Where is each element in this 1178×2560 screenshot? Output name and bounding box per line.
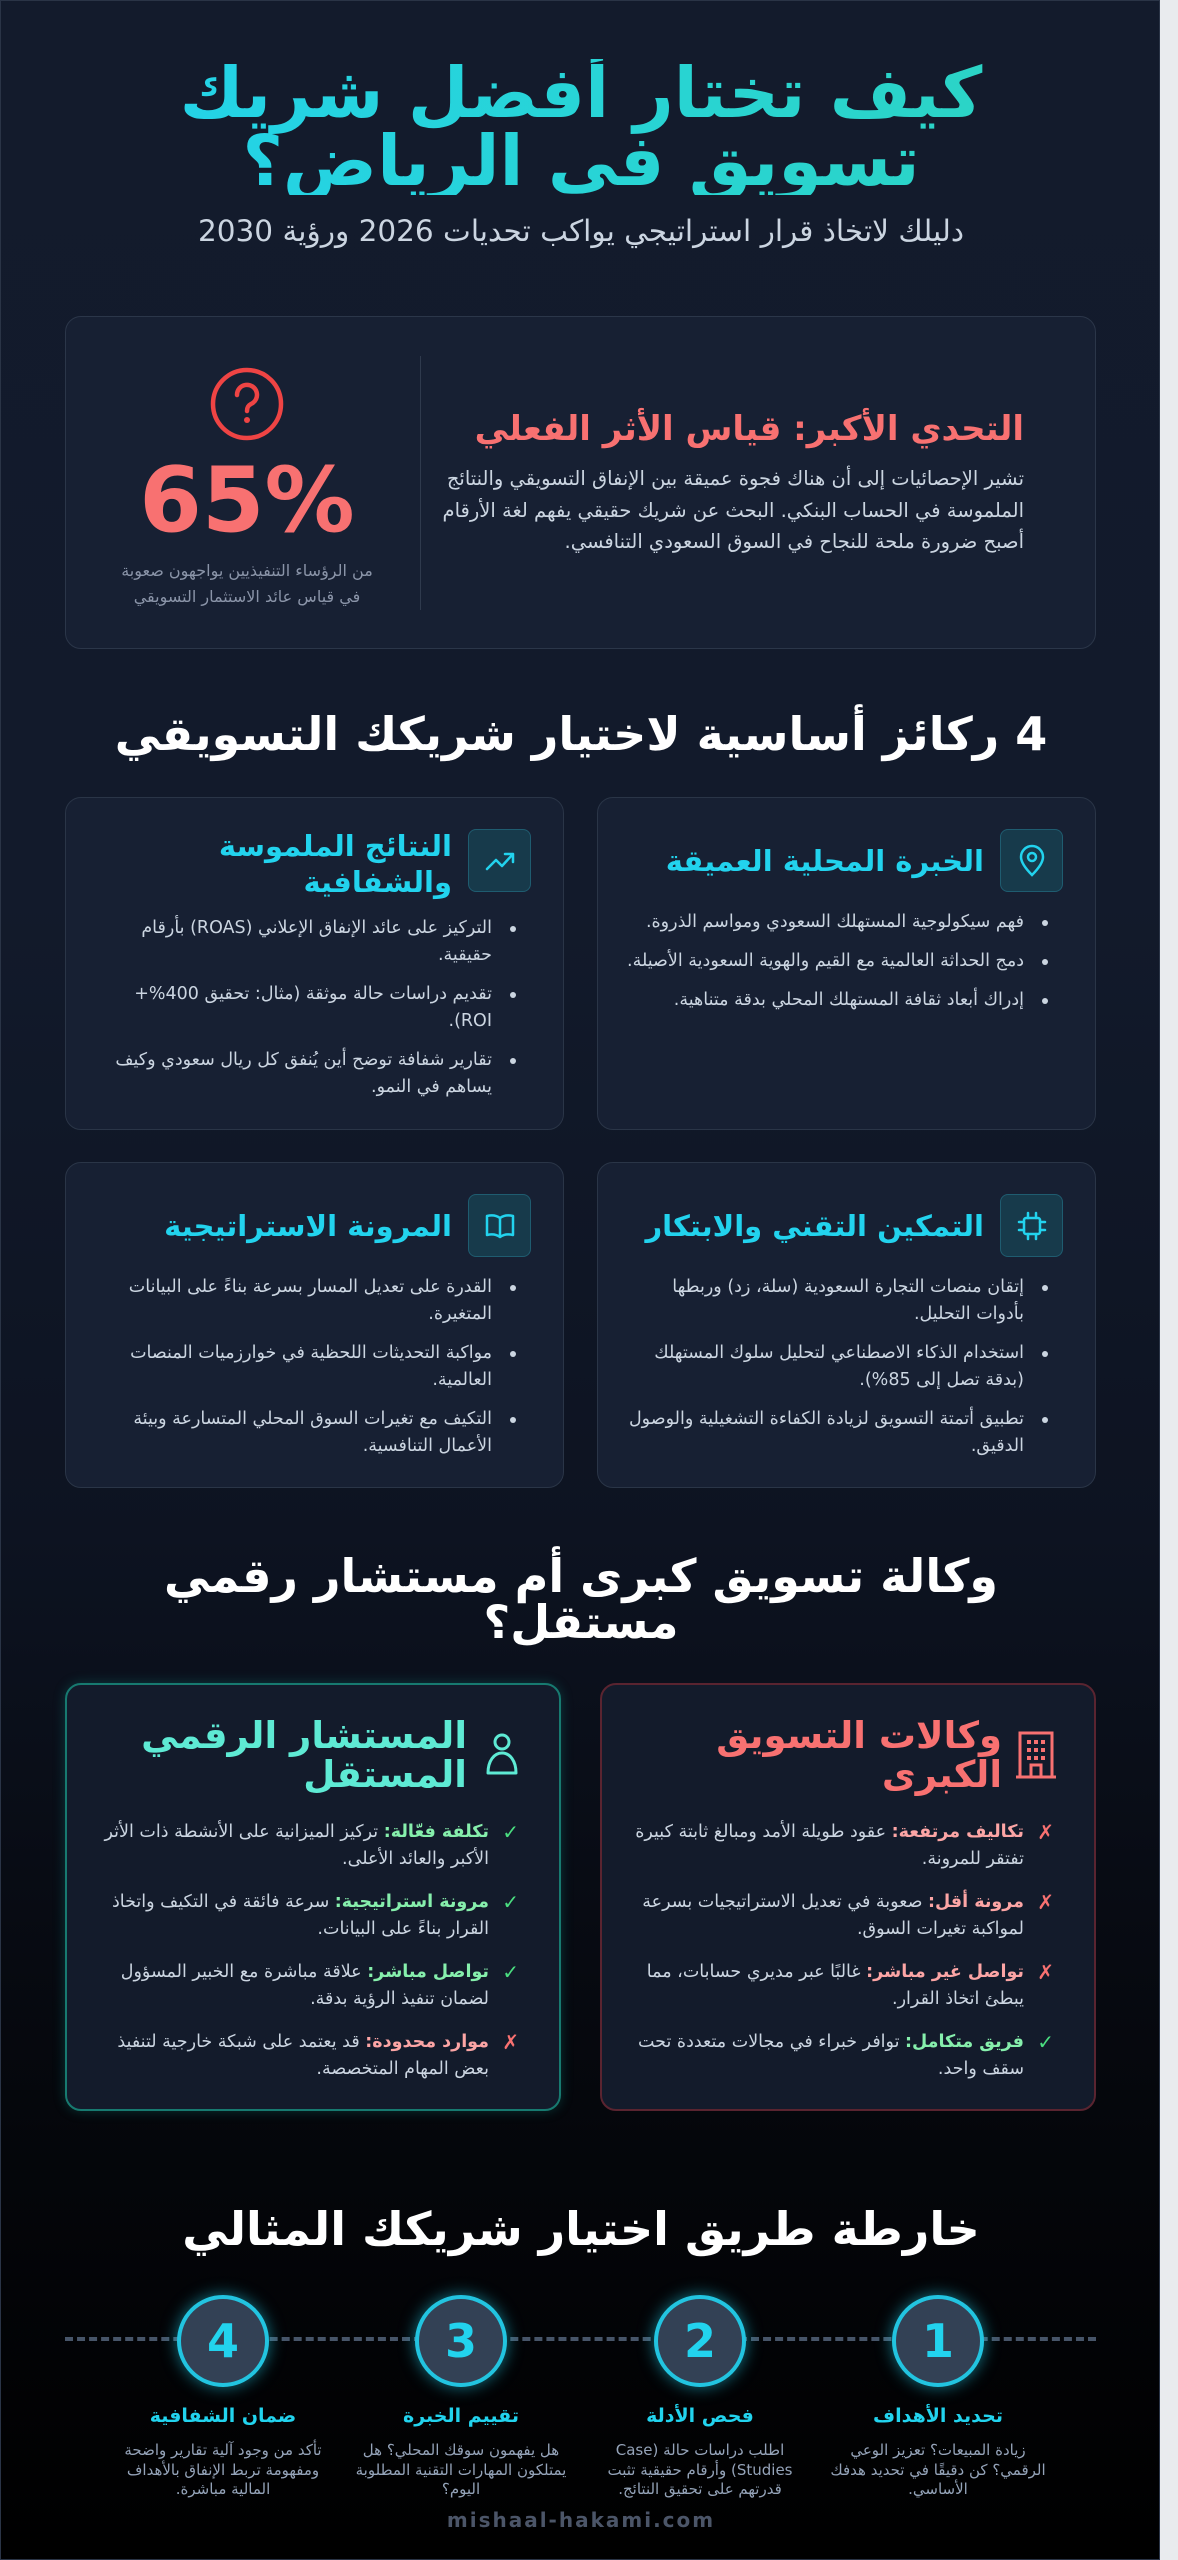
card title: التمكين التقني والابتكار	[645, 1209, 984, 1243]
heading: agency vs consultant	[164, 1546, 998, 1649]
title: المستقل	[303, 1753, 467, 1796]
step 3	[356, 2284, 566, 2498]
bullets	[115, 915, 516, 1097]
card title: النتائج الملموسة	[219, 829, 452, 863]
icon: location pin	[1000, 829, 1063, 892]
list: ✓	[502, 1820, 519, 1844]
step 3: هل يفهمون سوقك المحلي؟ هل يمتلكون المهارات التقنية المطلوبة اليوم؟	[356, 2441, 566, 2498]
card: tech enablement	[597, 1162, 1096, 1488]
list: ✗	[1037, 1820, 1054, 1844]
list: تكاليف مرتفعة: عقود طويلة الأمد ومبالغ ثابتة كبيرة تفتقر للمرونة.	[635, 1822, 1024, 1869]
bullets: القدرة على تعديل المسار بسرعة بناءً على البيانات المتغيرة.	[129, 1277, 492, 1324]
list: مرونة أقل: صعوبة في تعديل الاستراتيجيات بسرعة لمواكبة تغيرات السوق.	[642, 1892, 1024, 1939]
list: موارد محدودة: قد يعتمد على شبكة خارجية لتنفيذ بعض المهام المتخصصة.	[117, 2032, 489, 2079]
icon: trend up	[468, 829, 531, 892]
list	[104, 1820, 519, 2079]
heading: roadmap: خارطة طريق اختيار شريكك المثالي	[182, 2202, 980, 2256]
bullets: إتقان منصات التجارة السعودية (سلة، زد) وربطها بأدوات التحليل.	[672, 1277, 1024, 1324]
list: فريق متكامل: توافر خبراء في مجالات متعددة تحت سقف واحد.	[638, 2032, 1024, 2079]
bullets: تقارير شفافة توضح أين يُنفق كل ريال سعودي وكيف يساهم في النمو.	[115, 1050, 492, 1097]
panel: independent consultant	[65, 1683, 561, 2111]
step 4: ضمان الشفافية	[150, 2405, 296, 2427]
panel: big agencies	[600, 1683, 1096, 2111]
step 2: 2	[684, 2314, 716, 2368]
bullets: تقديم دراسات حالة موثقة (مثال: تحقيق 400%+ ROI).	[134, 984, 492, 1031]
title: الكبرى	[882, 1753, 1002, 1796]
card title: والشفافية	[303, 865, 452, 899]
step 1	[830, 2284, 1046, 2498]
title: المستشار الرقمي	[141, 1714, 467, 1757]
step 4: تأكد من وجود آلية تقارير واضحة ومفهومة تربط الإنفاق بالأهداف المالية مباشرة.	[124, 2441, 322, 2498]
title: تسويق في الرياض؟	[242, 120, 920, 202]
list: تكلفة فعّالة: تركيز الميزانية على الأنشطة ذات الأثر الأكبر والعائد الأعلى.	[104, 1822, 489, 1869]
card: strategic flexibility	[65, 1162, 564, 1488]
icon: person	[486, 1734, 518, 1774]
list: ✗	[1037, 1890, 1054, 1914]
title	[1, 59, 1161, 195]
list: ✓	[502, 1960, 519, 1984]
bullets: التركيز على عائد الإنفاق الإعلاني (ROAS) بأرقام حقيقية.	[141, 918, 492, 965]
title: كيف تختار أفضل شريك	[180, 52, 982, 134]
icon: building	[1016, 1732, 1056, 1778]
card title	[219, 829, 452, 900]
icon: book	[468, 1194, 531, 1257]
heading: agency vs consultant: وكالة تسويق كبرى أم مستشار رقمي	[164, 1549, 998, 1603]
bullets	[627, 912, 1048, 1010]
list: مرونة استراتيجية: سرعة فائقة في التكيف واتخاذ القرار بناءً على البيانات.	[112, 1892, 489, 1939]
card: local expertise	[597, 797, 1096, 1130]
stat caption: في قياس عائد الاستثمار التسويقي	[134, 587, 360, 606]
list: ✓	[1037, 2030, 1054, 2054]
step 1: زيادة المبيعات؟ تعزيز الوعي الرقمي؟ كن دقيقًا في تحديد هدفك الأساسي.	[830, 2441, 1046, 2498]
title	[716, 1714, 1002, 1796]
bullets: التكيف مع تغيرات السوق المحلي المتسارعة وبيئة الأعمال التنافسية.	[133, 1409, 492, 1456]
footer: mishaal-hakami.com	[447, 2508, 715, 2532]
bullets: دمج الحداثة العالمية مع القيم والهوية السعودية الأصيلة.	[627, 951, 1024, 971]
list	[635, 1820, 1054, 2079]
step 4	[124, 2284, 322, 2498]
stat 65%: 65%	[139, 448, 355, 553]
step 3: 3	[445, 2314, 477, 2368]
title	[141, 1714, 467, 1796]
list: ✗	[502, 2030, 519, 2054]
title: وكالات التسويق	[716, 1714, 1002, 1757]
step 2: فحص الأدلة	[646, 2405, 754, 2427]
bullets: مواكبة التحديثات اللحظية في خوارزميات المنصات العالمية.	[130, 1343, 492, 1390]
bullets: إدراك أبعاد ثقافة المستهلك المحلي بدقة متناهية.	[674, 990, 1024, 1010]
icon: question circle	[210, 368, 284, 440]
list: ✓	[502, 1890, 519, 1914]
stat caption	[121, 561, 373, 606]
list: ✗	[1037, 1960, 1054, 1984]
challenge text: تشير الإحصائيات إلى أن هناك فجوة عميقة بين الإنفاق التسويقي والنتائج الملموسة في الحساب البنكي. البحث عن شريك حقيقي يفهم لغة الأرقام أصبح ضرورة ملحة للنجاح في السوق السعودي التنافسي.	[443, 467, 1024, 553]
stat caption: من الرؤساء التنفيذيين يواجهون صعوبة	[121, 561, 373, 580]
challenge heading: التحدي الأكبر: قياس الأثر الفعلي	[475, 409, 1024, 449]
heading: 4 pillars: 4 ركائز أساسية لاختيار شريكك التسويقي	[115, 707, 1047, 761]
list: تواصل مباشر: علاقة مباشرة مع الخبير المسؤول لضمان تنفيذ الرؤية بدقة.	[121, 1962, 489, 2009]
step 1: 1	[922, 2314, 954, 2368]
bullets: تطبيق أتمتة التسويق لزيادة الكفاءة التشغيلية والوصول الدقيق.	[629, 1409, 1024, 1456]
step 4: 4	[207, 2314, 239, 2368]
icon: chip	[1000, 1194, 1063, 1257]
step 3: تقييم الخبرة	[403, 2405, 519, 2427]
step 2	[608, 2284, 792, 2498]
card title: المرونة الاستراتيجية	[164, 1209, 452, 1243]
card title: الخبرة المحلية العميقة	[666, 844, 984, 878]
card: tangible results	[65, 797, 564, 1130]
subtitle: دليلك لاتخاذ قرار استراتيجي يواكب تحديات 2026 ورؤية 2030	[198, 214, 964, 248]
bullets	[629, 1277, 1048, 1456]
step 1: تحديد الأهداف	[873, 2405, 1003, 2427]
step 2: اطلب دراسات حالة (Case Studies) وأرقام حقيقية تثبت قدرتهم على تحقيق النتائج.	[608, 2441, 792, 2498]
bullets: استخدام الذكاء الاصطناعي لتحليل سلوك المستهلك (بدقة تصل إلى 85%).	[654, 1343, 1024, 1390]
bullets: فهم سيكولوجية المستهلك السعودي ومواسم الذروة.	[646, 912, 1024, 932]
bullets	[129, 1277, 516, 1456]
list: تواصل غير مباشر: غالبًا عبر مديري حسابات، مما يبطئ اتخاذ القرار.	[647, 1962, 1024, 2009]
panel: biggest challenge	[65, 316, 1096, 649]
heading: agency vs consultant: مستقل؟	[484, 1595, 678, 1649]
